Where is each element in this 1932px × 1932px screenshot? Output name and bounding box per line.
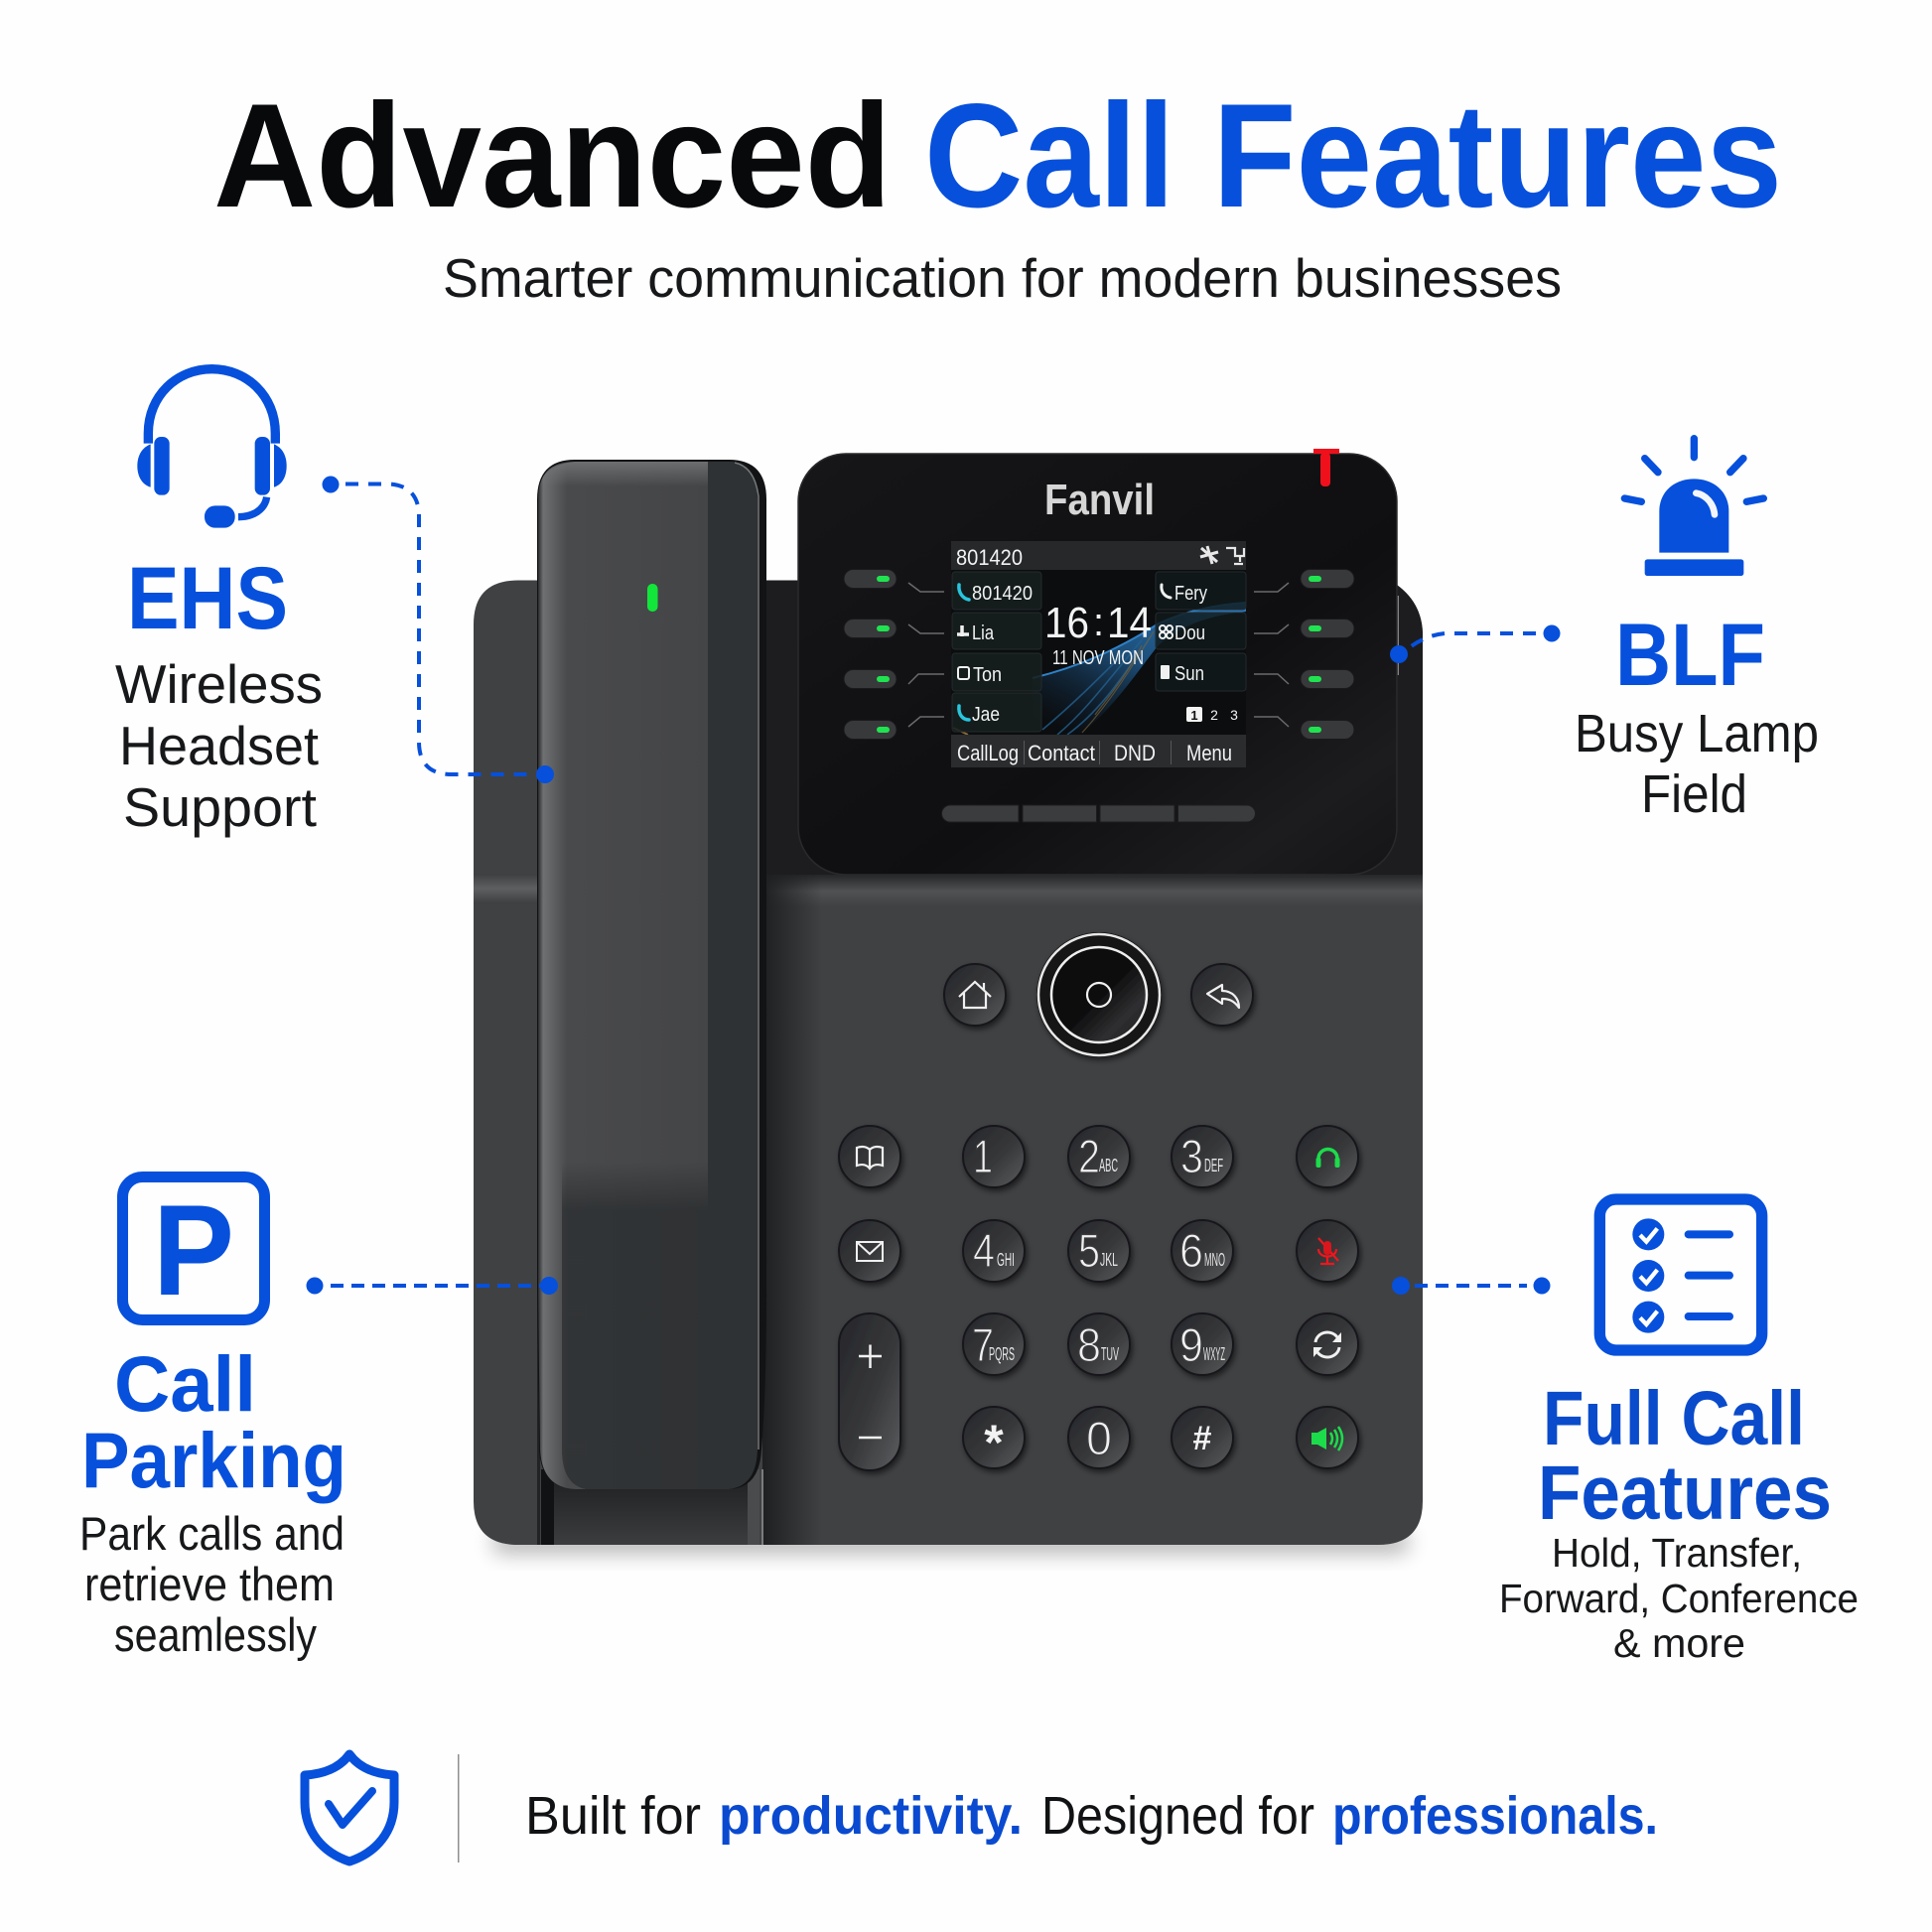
description: seamlessly (114, 1608, 317, 1661)
desk phone (474, 449, 1423, 1555)
phone body (474, 580, 1423, 1545)
number keys: 6 (1179, 1224, 1203, 1277)
button: phonebook (839, 1126, 900, 1187)
number keys: JKL (1100, 1250, 1118, 1270)
page indicator: 3 (1230, 707, 1238, 723)
number keys: MNO (1204, 1250, 1225, 1270)
LCD screen: CallLog (957, 741, 1019, 765)
connector: Call Parking (306, 1277, 558, 1295)
description: Headset (119, 715, 319, 776)
upper shelf behind display (764, 580, 1423, 875)
heading: BLF (1615, 605, 1765, 704)
number keys: PQRS (989, 1344, 1015, 1364)
page indicator: 1 (1190, 708, 1198, 723)
connector: Full Call Features (1392, 1277, 1551, 1295)
description: Busy Lamp (1575, 704, 1819, 763)
heading: Full Call (1543, 1376, 1805, 1461)
description: Hold, Transfer, (1552, 1530, 1802, 1576)
number keys (963, 1126, 1233, 1470)
number keys: # (1193, 1420, 1212, 1457)
subtitle: Smarter communication for modern businesses (443, 247, 1562, 309)
LCD screen: Contact (1028, 741, 1095, 765)
wallpaper swoosh (953, 603, 1246, 735)
shelf highlight band: right (764, 875, 1423, 907)
shelf highlight band: left (474, 874, 539, 903)
keypad (839, 932, 1358, 1470)
right contact cells: Fery (1174, 583, 1207, 605)
page indicator (1186, 707, 1238, 723)
description (1575, 704, 1819, 824)
number keys: 4 (973, 1224, 995, 1277)
number keys: 8 (1077, 1318, 1101, 1371)
connector: EHS (322, 477, 554, 783)
header bar (951, 541, 1246, 570)
panel: BLF (1575, 439, 1819, 824)
number keys: WXYZ (1203, 1344, 1225, 1364)
button: home (944, 964, 1006, 1026)
number keys: 2 (1078, 1130, 1100, 1182)
LCD screen: Menu (1186, 741, 1232, 765)
title: Call Features (924, 72, 1782, 238)
LCD screen: DND (1114, 741, 1156, 765)
number keys: 5 (1078, 1224, 1100, 1277)
brand logo: Fanvil (1044, 476, 1155, 524)
panel: Full Call Features (1499, 1199, 1859, 1666)
date: 11 NOV MON (1052, 647, 1144, 669)
handset (537, 460, 766, 1489)
clock (1044, 599, 1152, 647)
connector: BLF (1390, 625, 1561, 663)
heading (1538, 1376, 1832, 1536)
volume rocker (839, 1313, 900, 1470)
icon: headset (137, 369, 287, 528)
left contact cells (952, 572, 1041, 732)
description: Park calls and (79, 1507, 345, 1560)
button: speaker (1297, 1407, 1358, 1468)
display head (798, 449, 1397, 875)
status LED (647, 584, 657, 612)
left contact cells: Jae (972, 704, 1000, 726)
panel: Call Parking (79, 1177, 346, 1661)
divider (458, 1754, 459, 1863)
soft keys (941, 805, 1255, 822)
number keys: 1 (973, 1130, 993, 1182)
number keys: 3 (1180, 1130, 1203, 1182)
tagline: Designed for (1041, 1786, 1314, 1846)
number keys: GHI (997, 1250, 1015, 1270)
description: Wireless (115, 653, 323, 715)
left contact cells: 801420 (972, 583, 1033, 605)
footer (305, 1754, 1658, 1863)
number keys: TUV (1101, 1344, 1119, 1364)
tagline: productivity. (719, 1786, 1023, 1846)
button: back (1191, 964, 1253, 1026)
side shading beside handset (762, 875, 822, 1545)
description (79, 1507, 345, 1661)
number keys: 7 (972, 1318, 994, 1371)
handset cradle (537, 1291, 763, 1545)
clock: 16 (1044, 599, 1089, 647)
button: mute (1297, 1220, 1358, 1282)
phone ground shadow (491, 1529, 1410, 1555)
icon: busy lamp (1624, 439, 1763, 576)
title: Advanced (213, 72, 892, 238)
number keys: 9 (1179, 1318, 1203, 1371)
clock: : (1093, 601, 1104, 644)
number keys: 0 (1086, 1412, 1112, 1464)
softkey bar (951, 735, 1246, 767)
number keys: * (984, 1415, 1004, 1470)
right contact cells (1156, 572, 1246, 691)
red indicator (1313, 449, 1339, 486)
icon: parking sign: P (153, 1177, 234, 1322)
page indicator: 2 (1210, 707, 1218, 723)
heading (81, 1339, 346, 1504)
left contact cells: Ton (973, 664, 1002, 686)
left line keys (844, 570, 944, 739)
number keys: ABC (1099, 1156, 1118, 1175)
right side wing highlight (1397, 596, 1399, 675)
heading: Features (1538, 1450, 1832, 1536)
right contact cells: Dou (1174, 622, 1205, 644)
button: transfer (1297, 1313, 1358, 1375)
number keys: DEF (1204, 1156, 1223, 1175)
description (1499, 1530, 1859, 1666)
right contact cells: Sun (1174, 663, 1204, 685)
button: messages (839, 1220, 900, 1282)
title (213, 72, 1782, 238)
description: Support (123, 776, 317, 838)
LCD screen: 801420 (956, 545, 1023, 570)
LCD screen (951, 541, 1246, 767)
button: headset (1297, 1126, 1358, 1187)
panel: EHS (115, 369, 323, 838)
description: Forward, Conference (1499, 1576, 1859, 1621)
heading: Call (114, 1339, 256, 1428)
navigation ring (1036, 932, 1162, 1057)
tagline: professionals. (1332, 1786, 1658, 1846)
description: Field (1641, 764, 1747, 824)
icon: feature checklist (1599, 1199, 1762, 1350)
right line keys (1254, 570, 1354, 739)
icon: shield (305, 1754, 394, 1862)
left contact cells: Lia (972, 622, 995, 644)
description: retrieve them (84, 1558, 335, 1610)
heading: EHS (127, 548, 288, 647)
heading: Parking (81, 1416, 346, 1504)
clock: 14 (1107, 599, 1152, 647)
description (115, 653, 323, 838)
tagline (525, 1786, 1658, 1846)
description: & more (1613, 1620, 1745, 1666)
icon: parking sign (123, 1177, 264, 1322)
tagline: Built for (525, 1786, 701, 1846)
